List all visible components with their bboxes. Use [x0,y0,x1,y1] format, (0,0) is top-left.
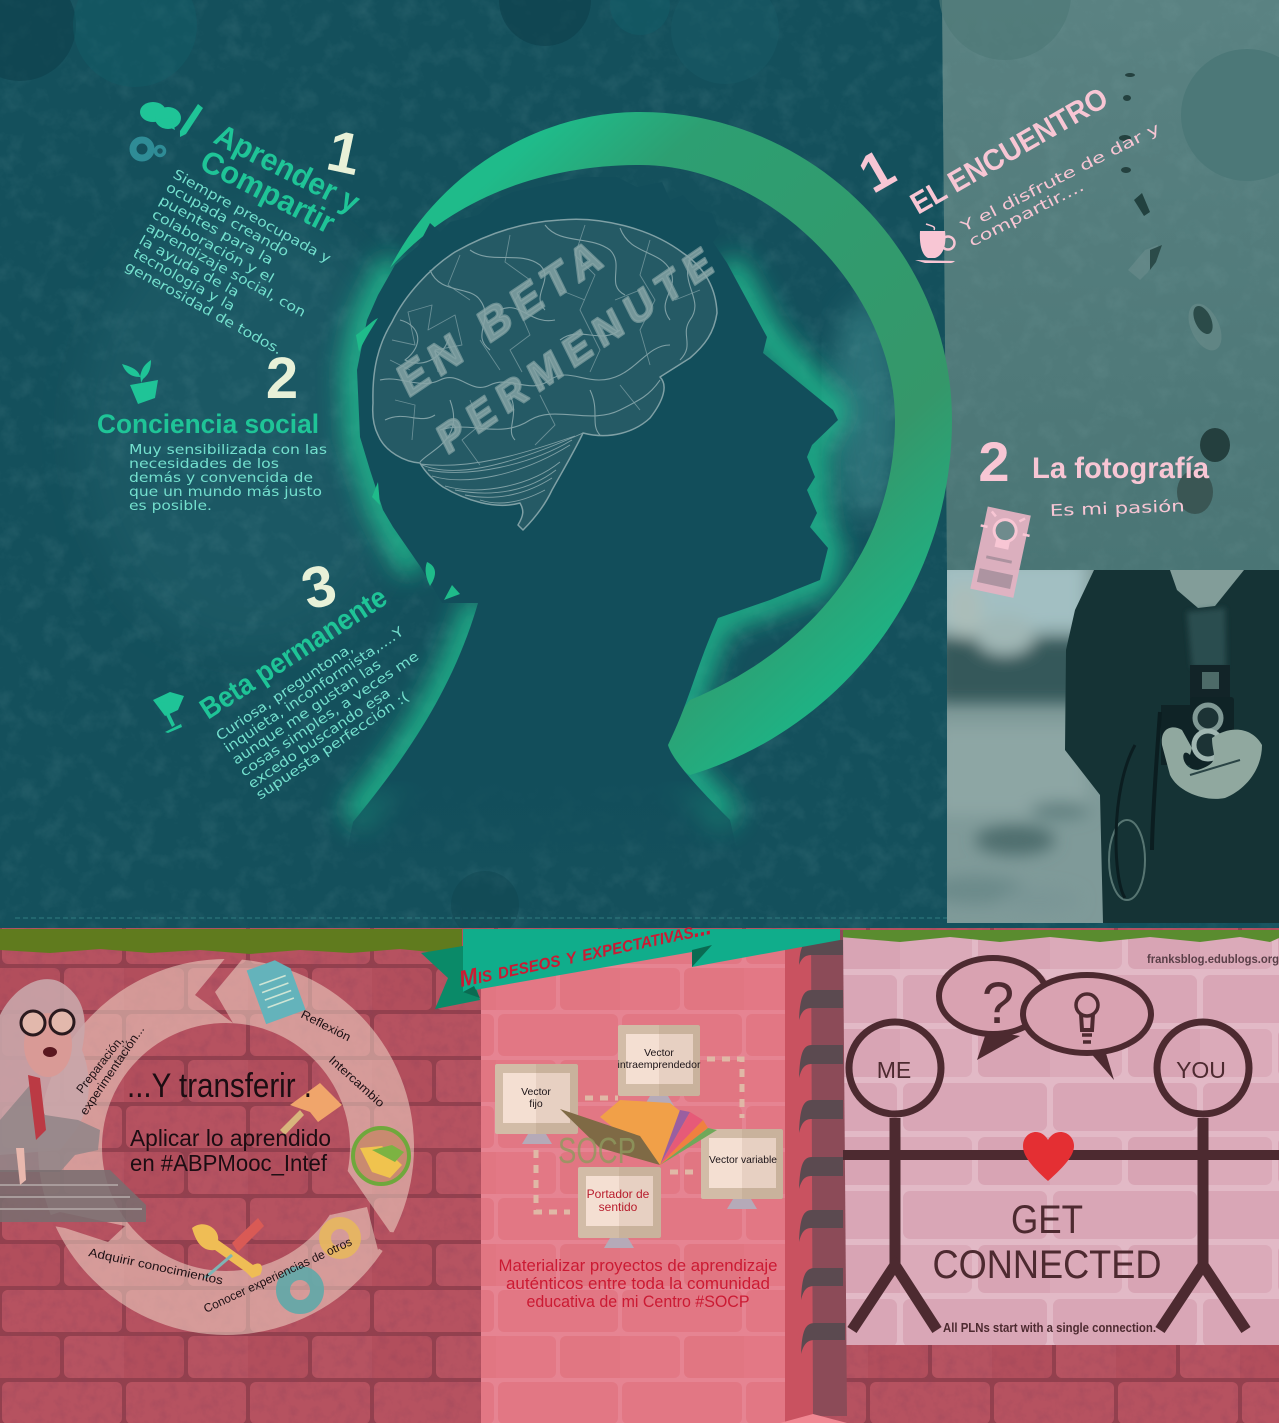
icon: coffee cup [915,224,955,263]
dashed connectors [536,1059,742,1212]
heading: Compartir [195,143,341,241]
panel: right connections page [840,930,1279,1345]
text block: Es mi pasión [1049,496,1185,520]
head glow [353,262,833,820]
panel: photographer photo [925,560,1279,923]
icon: handshake [353,1128,409,1184]
illustration: surprised woman at keyboard [0,979,146,1222]
monitor: vector fijo: Vector [521,1086,551,1098]
section: el encuentro [849,81,1163,263]
speech bubble: question [939,958,1047,1060]
text block: la ayuda de la [136,233,242,301]
icon: chat bubbles and pencil [140,102,203,137]
text block: demás y convencida de [129,470,313,486]
number 2: 2 [266,346,298,411]
icon: heart [1023,1132,1074,1181]
ribbon banner [421,913,840,1009]
icon: phone with light bulb [967,506,1034,598]
text block [213,623,422,803]
notebook spiral rings [799,940,845,1354]
icon: light bulb [1076,994,1098,1042]
heading: Beta permanente [194,581,393,726]
brain illustration [373,219,717,530]
text block: es posible. [129,498,212,514]
cycle labels: Reflexión [299,1007,353,1044]
section: beta permanente [153,552,422,803]
text block: Aplicar lo aprendido [130,1125,331,1151]
panel: footprints photo [939,0,1279,570]
cycle diagram [0,959,414,1335]
ribbon title: Mis deseos y expectativas... [457,913,713,992]
text block: supuesta perfección :( [253,689,412,803]
text block: excedo buscando esa [245,685,394,792]
cycle labels [73,1007,388,1316]
notebook spine [780,930,847,1423]
number 2: 2 [978,430,1010,493]
panel: centre pink page [481,930,787,1423]
icon: wrench and screwdriver [192,1218,264,1278]
text block: materializar proyectos: Materializar proyectos de aprendizaje [498,1257,778,1275]
icon: document [247,956,306,1024]
SOCP label: SOCP [558,1130,636,1171]
text block: Curiosa, preguntona, [213,640,357,744]
monitor: portador de sentido: sentido [599,1200,638,1214]
text block: ocupada creando [163,180,292,260]
section: conciencia social [97,346,327,514]
text block: Siempre preocupada y [170,167,334,267]
figure: me [849,1022,941,1330]
text block: puentes para la [156,193,276,269]
section: la fotografia [967,430,1209,598]
heading: EL ENCUENTRO [905,81,1114,221]
figure: me: ME [877,1057,911,1083]
brain title text: PERMENUTE [431,239,719,463]
panel: brick wall background [0,928,1279,1423]
text block: en #ABPMooc_Intef [130,1150,328,1176]
text block: que un mundo más justo [129,484,322,500]
cycle labels: Adquirir conocimientos [87,1245,224,1287]
text block: aprendizaje social, con [143,220,308,321]
monitor: vector fijo: fijo [529,1098,543,1110]
text block [129,442,327,514]
monitor: vector variable [701,1129,783,1209]
text block: Y el disfrute de dar y [956,119,1163,236]
monitor: vector intraemprendedor [618,1025,701,1106]
green grass strip [0,929,462,954]
text block: inquieta, inconformista,....Y [221,623,408,756]
monitor: portador de sentido [578,1167,661,1248]
head silhouette [340,177,838,885]
heading: transferir: ...Y transferir . [127,1067,312,1105]
number 1: 1 [849,138,905,205]
get connected text: CONNECTED [932,1243,1162,1287]
monitor: vector intraemprendedor: intraemprendedor [618,1059,701,1071]
icon: gears [283,1223,355,1307]
monitor: vector variable: Vector variable [709,1154,777,1166]
heading: Conciencia social [97,409,319,439]
icon: pushpin [280,1083,342,1135]
speech bubble: question: ? [982,971,1014,1036]
figure: you: YOU [1176,1057,1226,1083]
get connected text: GET [1011,1198,1083,1242]
hands [1162,727,1262,799]
text block [122,167,334,358]
text block: generosidad de todos. [122,259,285,358]
text block: compartir.... [966,177,1087,251]
monitor: portador de sentido: Portador de [587,1187,650,1201]
text block: materializar proyectos: auténticos entre toda la comunidad [506,1275,770,1293]
number 3: 3 [295,552,343,623]
open book [560,1100,717,1165]
cycle labels: Conocer experiencias de otros [201,1235,354,1316]
cycle labels: Preparación, [73,1034,126,1096]
brain title text: EN BETA [391,229,611,407]
text block [130,1125,331,1176]
section: aprender y compartir [122,102,367,358]
text block [956,119,1163,251]
cycle labels: experimentación... [77,1023,147,1118]
icon: flag [153,692,184,733]
speech bubble: idea [1023,975,1151,1080]
text block: cosas simples, a veces me [237,649,422,780]
dashed divider [15,917,947,919]
text block: necesidades de los [129,456,279,472]
panel: top teal background [0,0,1279,939]
stick figures diagram [843,952,1279,1335]
heading: La fotografía [1032,452,1209,485]
heading: Aprender y [209,117,366,220]
icon: plant [122,360,158,404]
icon: gears [133,140,164,158]
tagline: All PLNs start with a single connection. [943,1321,1156,1335]
vector diagram [495,1025,783,1248]
text block: aunque me gustan las [229,657,384,768]
hair leaves [356,318,460,600]
text block: tecnología y la [130,246,238,315]
connection line [843,1150,1279,1160]
monitor: vector fijo [495,1064,578,1144]
text block: materializar proyectos: educativa de mi Centro #SOCP [526,1293,750,1311]
text block: materializar proyectos [498,1257,778,1311]
number 1: 1 [322,118,367,188]
circular arrows [40,959,414,1335]
text block: colaboración y el [149,207,277,287]
get connected text [932,1198,1162,1287]
arc ring around head [390,112,952,775]
monitor: vector intraemprendedor: Vector [644,1047,674,1059]
text block: Muy sensibilizada con las [129,442,327,458]
figure: you [1157,1022,1249,1330]
cycle labels: Intercambio [326,1053,388,1110]
